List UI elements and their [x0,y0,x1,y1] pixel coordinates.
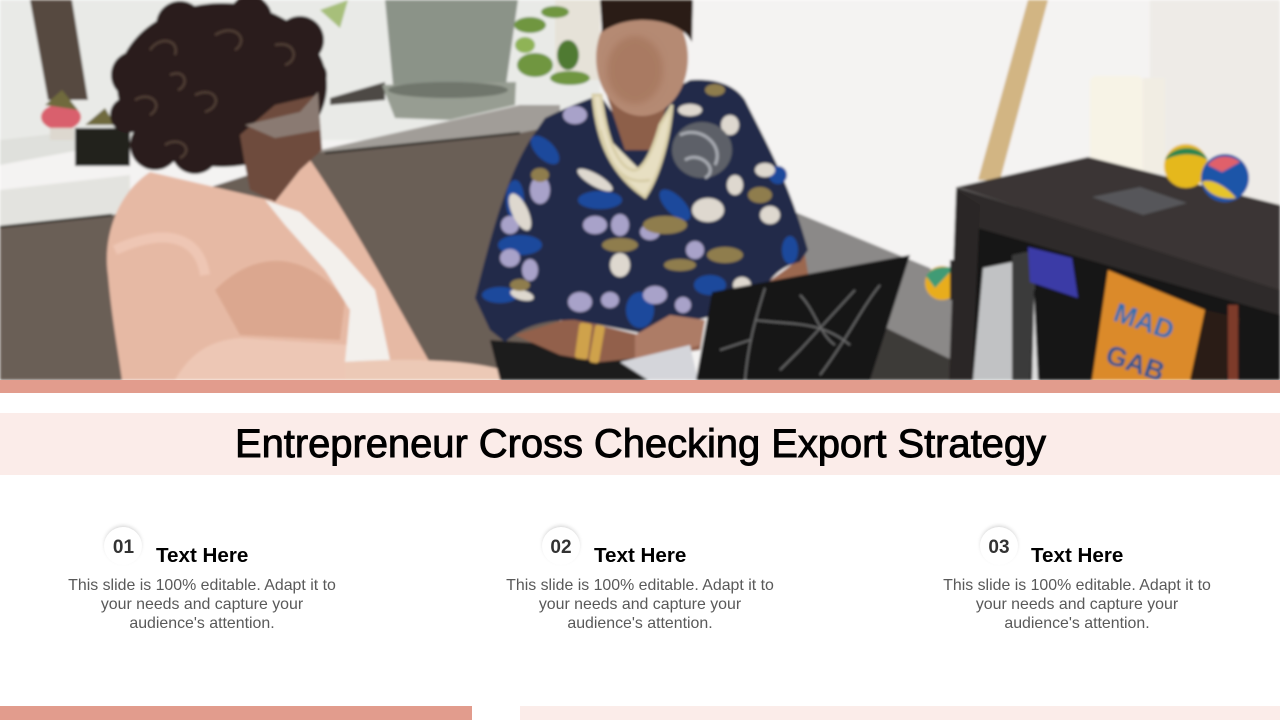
title: Entrepreneur Cross Checking Export Strategy [235,422,1046,466]
woman right: bare forearm [515,318,705,362]
candle [1090,76,1143,178]
sofa [0,125,560,380]
photo: two women working on a sofa: MAD [1110,297,1178,346]
body text 3: your needs and capture your [976,596,1178,613]
dress pattern [482,84,798,328]
game box [1092,270,1205,380]
coaster [1092,187,1187,215]
body text 1: audience's attention. [129,615,275,632]
body text 1: This slide is 100% editable. Adapt it to [68,577,336,594]
body text 2: your needs and capture your [539,596,741,613]
window sill [0,125,130,165]
grey sofa seat [790,210,952,380]
books [973,262,1012,380]
number badge 02: 02 [550,537,572,558]
body text 2 [506,577,774,632]
body text 3 [943,577,1211,632]
woman left: hand [345,360,522,380]
gold bracelets [575,322,605,364]
mushroom toy [41,104,81,130]
column 3 [943,524,1211,632]
shelf leg [949,190,980,380]
body text 3: This slide is 100% editable. Adapt it to [943,577,1211,594]
footer bar left [0,706,472,720]
heading 2: Text Here [594,544,686,567]
title band [0,413,1280,475]
pale sofa top [0,175,130,228]
photo accent bar [0,380,1280,393]
woman right: pants [490,340,660,380]
column 2 [506,524,774,632]
shelf interior [965,228,1280,380]
body text 2: This slide is 100% editable. Adapt it to [506,577,774,594]
footer bar right [520,706,1280,720]
wall [0,0,1280,380]
body text 1 [68,577,336,632]
flower pot [385,0,518,85]
juggling balls [1164,144,1249,202]
number badge 01: 01 [113,537,134,558]
body text 2: audience's attention. [567,615,713,632]
window frame [30,0,88,100]
number badge 03: 03 [988,537,1010,558]
shelf front rail [956,187,1280,320]
photo: two women working on a sofa [0,0,1280,380]
woman right: head [596,0,688,116]
woman left: curly hair [110,0,327,174]
heading 3: Text Here [1031,544,1123,567]
number badge 02 [542,527,580,565]
body text 1: your needs and capture your [101,596,303,613]
laptop lid [696,255,910,380]
column 1 [68,524,336,632]
shelf top [957,157,1280,292]
body text 3: audience's attention. [1004,615,1150,632]
hand [635,315,705,358]
woman left: glasses [245,92,320,138]
pearl necklace [593,95,672,197]
laptop keyboard [620,345,698,380]
woman left: jacket [107,160,440,380]
plant and white pot [555,0,600,80]
woman right: dress [475,80,808,342]
heading 1: Text Here [156,544,248,567]
number badge 01 [104,527,142,565]
bamboo [978,0,1048,180]
ball on sofa [925,266,959,300]
woman left: face [240,95,322,202]
number badge 03 [980,527,1018,565]
woman right: neck [605,90,670,150]
woman left: blouse [265,200,390,362]
